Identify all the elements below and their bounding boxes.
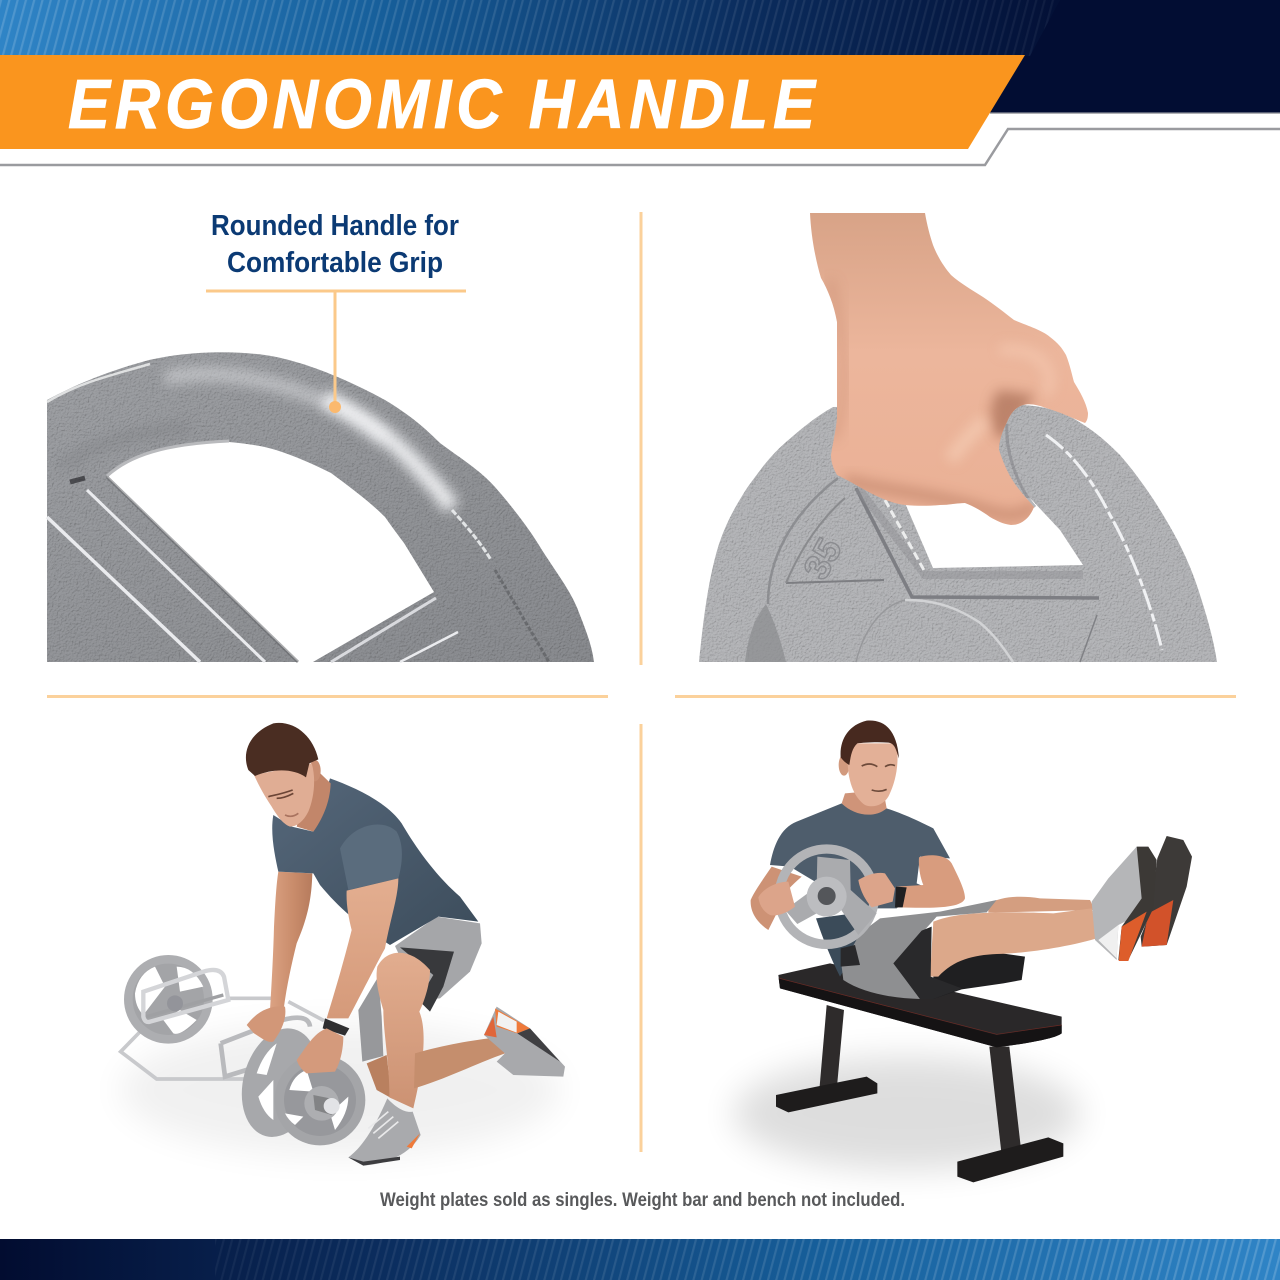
ear: [309, 760, 321, 781]
shorts dark panel: [893, 927, 962, 999]
shorts dark panel: [400, 947, 454, 1012]
rear short leg: [358, 977, 383, 1062]
divider: panel separators: [47, 212, 1236, 1152]
hair: [841, 721, 899, 765]
right arm: [896, 855, 965, 908]
footer band: [0, 1239, 1280, 1280]
plate: [779, 849, 877, 944]
lower back leg: [414, 1037, 505, 1088]
bench pad: [778, 963, 1062, 1047]
shirt sleeve: [340, 824, 402, 890]
left hand: [758, 882, 795, 915]
rear calf: [367, 1055, 392, 1098]
plate handle image: [47, 352, 594, 662]
panel: man on bench: [733, 721, 1192, 1182]
hair: [246, 723, 318, 777]
window opening: [107, 442, 434, 662]
footnote: Weight plates sold as singles. Weight bar and bench not included.: [380, 1190, 905, 1211]
shorts: [395, 917, 482, 1000]
watch: [323, 1018, 349, 1036]
face: [848, 743, 898, 806]
rear plate in hand: [230, 1020, 330, 1146]
shirt lower: [816, 913, 858, 977]
front shoe: [348, 1098, 421, 1166]
left hand: [247, 1006, 285, 1042]
back shoe: [484, 1007, 565, 1077]
right arm: [327, 878, 398, 1018]
dark shorts under leg: [933, 953, 1025, 999]
hand: [810, 213, 1088, 525]
title banner: [0, 55, 1280, 165]
left arm: [270, 872, 312, 1010]
shorts band: [841, 945, 860, 967]
shirt: [770, 803, 950, 908]
near shoe: [1092, 847, 1157, 961]
far shoe: [1141, 836, 1192, 947]
title: ERGONOMIC HANDLE: [68, 66, 817, 144]
bench legs: [776, 1005, 1063, 1182]
right hand: [858, 873, 895, 907]
far leg: [988, 897, 1095, 913]
header band: [0, 0, 1280, 114]
floor shadow: [733, 1057, 1080, 1170]
window opening: [905, 498, 1083, 568]
front plate: [275, 1055, 365, 1145]
callout heading: Rounded Handle for: [211, 210, 459, 242]
bench side: [779, 978, 1062, 1047]
right hand: [297, 1028, 343, 1073]
ears: [839, 754, 849, 776]
mouth: [285, 813, 298, 816]
near leg: [930, 908, 1100, 977]
shirt: [272, 778, 478, 945]
watch: [895, 887, 907, 907]
facial features: [862, 764, 895, 791]
plate inner shadow: [745, 604, 786, 662]
far plate: [128, 959, 228, 1039]
front leg: [377, 953, 430, 1108]
hex bar: [121, 998, 324, 1079]
panel: man loading plates: [120, 723, 565, 1166]
face: [254, 763, 314, 827]
panel: handle close-up: [47, 210, 594, 662]
brow and eye: [268, 790, 293, 798]
callout heading: Comfortable Grip: [227, 247, 443, 279]
neck: [842, 790, 887, 815]
panel: hand gripping plate: [699, 213, 1217, 662]
bench stitching: [779, 978, 1062, 1034]
floor shadow: [120, 1023, 560, 1157]
plate weight marking: 35: [795, 531, 850, 586]
neck: [297, 767, 331, 832]
shorts: [842, 900, 997, 999]
left arm: [751, 867, 802, 930]
callout: rounded handle: [206, 210, 466, 413]
plate: [699, 405, 1217, 662]
